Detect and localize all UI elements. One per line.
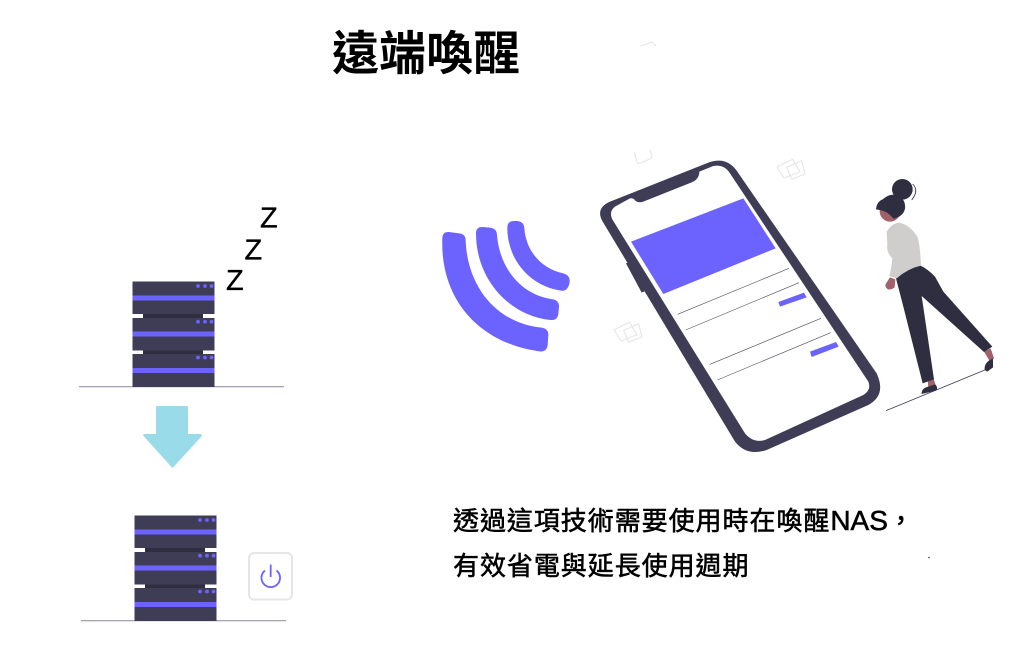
face (880, 201, 900, 222)
stray dot (928, 557, 930, 558)
sleep letters (226, 202, 278, 297)
person standing on slope (876, 179, 994, 411)
title: 遠端喚醒 (332, 27, 520, 80)
phone (600, 161, 880, 452)
decorative floating squares (614, 42, 805, 342)
description text: 透過這項技術需要使用時在喚醒NAS， (453, 505, 915, 536)
sleep letters: Z (244, 234, 262, 266)
description text (453, 505, 915, 581)
phone buttons (778, 293, 839, 357)
server rack: awake (81, 516, 286, 621)
icon: power button (249, 553, 292, 600)
phone screen (611, 166, 869, 441)
sleep letters: Z (226, 265, 244, 297)
trousers (896, 265, 992, 383)
phone body (600, 161, 880, 452)
icon: wireless signal (442, 221, 570, 351)
hand (885, 277, 895, 289)
shirt (887, 223, 921, 278)
phone banner (631, 198, 776, 294)
slope line (886, 367, 993, 411)
arrow: down (143, 406, 202, 468)
hair (876, 195, 905, 219)
phone text lines (678, 268, 831, 380)
feet (928, 348, 994, 388)
server rack: sleeping (79, 282, 284, 387)
phone side button (626, 262, 646, 293)
sleep letters: Z (260, 202, 278, 234)
description text: 有效省電與延長使用週期 (453, 551, 749, 581)
